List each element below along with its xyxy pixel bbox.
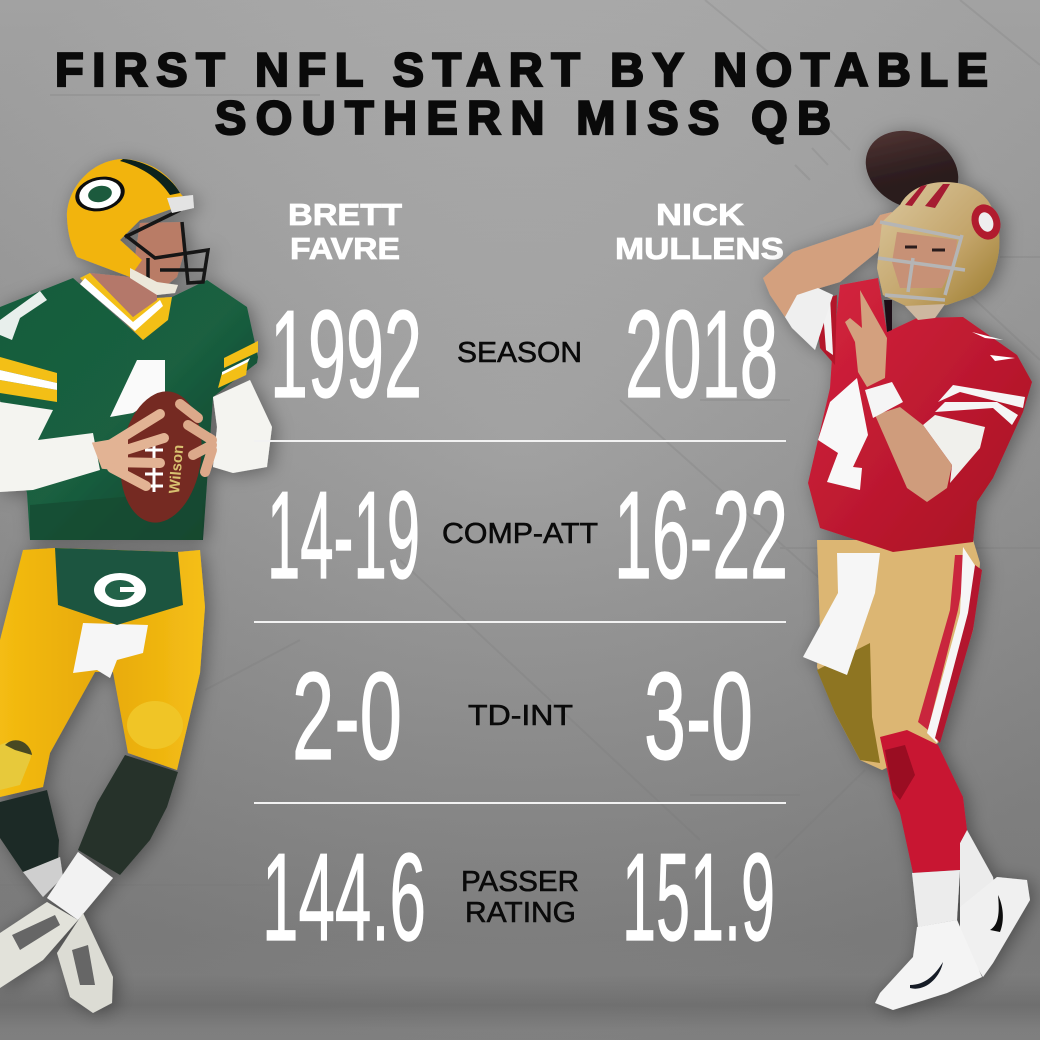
column header: Brett Favre <box>288 197 402 266</box>
white sock <box>912 870 960 927</box>
forearm <box>875 407 952 502</box>
column header: Nick Mullens <box>615 197 784 266</box>
player: Brett Favre <box>0 159 272 1013</box>
belt pouch <box>55 548 183 625</box>
row: passer rating <box>262 829 775 967</box>
football <box>112 386 210 528</box>
back sock <box>960 830 997 907</box>
back cleat <box>960 877 1030 977</box>
column header: Nick Mullens: MULLENS <box>615 231 784 266</box>
row: td-int <box>292 648 753 786</box>
hand <box>845 290 887 387</box>
football: Wilson <box>166 444 187 494</box>
red sock <box>880 730 967 873</box>
throwing arm <box>763 212 892 317</box>
helmet <box>877 182 1005 320</box>
row: season <box>270 286 778 424</box>
column header: Brett Favre: FAVRE <box>290 231 400 266</box>
row: season: 2018 <box>625 286 778 424</box>
helmet <box>67 159 208 295</box>
hands <box>96 404 212 486</box>
collar <box>80 273 172 340</box>
number 4 <box>110 360 165 417</box>
row: comp-att: 16-22 <box>614 467 788 605</box>
cleats <box>57 913 113 1013</box>
sleeve stripes <box>938 385 1025 408</box>
arms <box>0 402 100 492</box>
football <box>853 116 971 224</box>
pants <box>0 548 205 797</box>
row dividers <box>254 441 786 803</box>
text: 151.9 <box>622 829 775 967</box>
pants <box>817 540 980 770</box>
column header: Brett Favre: BRETT <box>288 197 402 232</box>
white sleeve <box>785 288 833 350</box>
pouch logo <box>94 573 146 607</box>
row: td-int: 3-0 <box>644 648 753 786</box>
player: Nick Mullens <box>763 116 1032 1010</box>
wrist band <box>865 382 903 418</box>
row: passer rating: RATING <box>465 897 576 929</box>
column header: Nick Mullens: NICK <box>656 197 745 232</box>
socks and lower legs <box>0 790 59 872</box>
front cleat <box>875 920 982 1010</box>
jersey <box>808 278 1032 552</box>
title: SOUTHERN MISS QB <box>215 91 831 144</box>
row: td-int: 2-0 <box>292 648 402 786</box>
towel <box>73 623 148 678</box>
jersey number 4 <box>818 378 868 490</box>
row: season: 1992 <box>270 286 422 424</box>
row: comp-att: COMP-ATT <box>442 518 598 550</box>
row: comp-att <box>267 467 788 605</box>
towel <box>803 553 880 675</box>
jersey <box>0 278 258 540</box>
row: td-int: TD-INT <box>468 700 573 732</box>
title: FIRST NFL START BY NOTABLE <box>55 43 988 96</box>
row: season: SEASON <box>457 337 582 369</box>
row: passer rating: PASSER <box>461 866 579 898</box>
row: comp-att: 14-19 <box>267 467 420 605</box>
title <box>55 43 988 144</box>
row: passer rating: 144.6 <box>262 829 426 967</box>
